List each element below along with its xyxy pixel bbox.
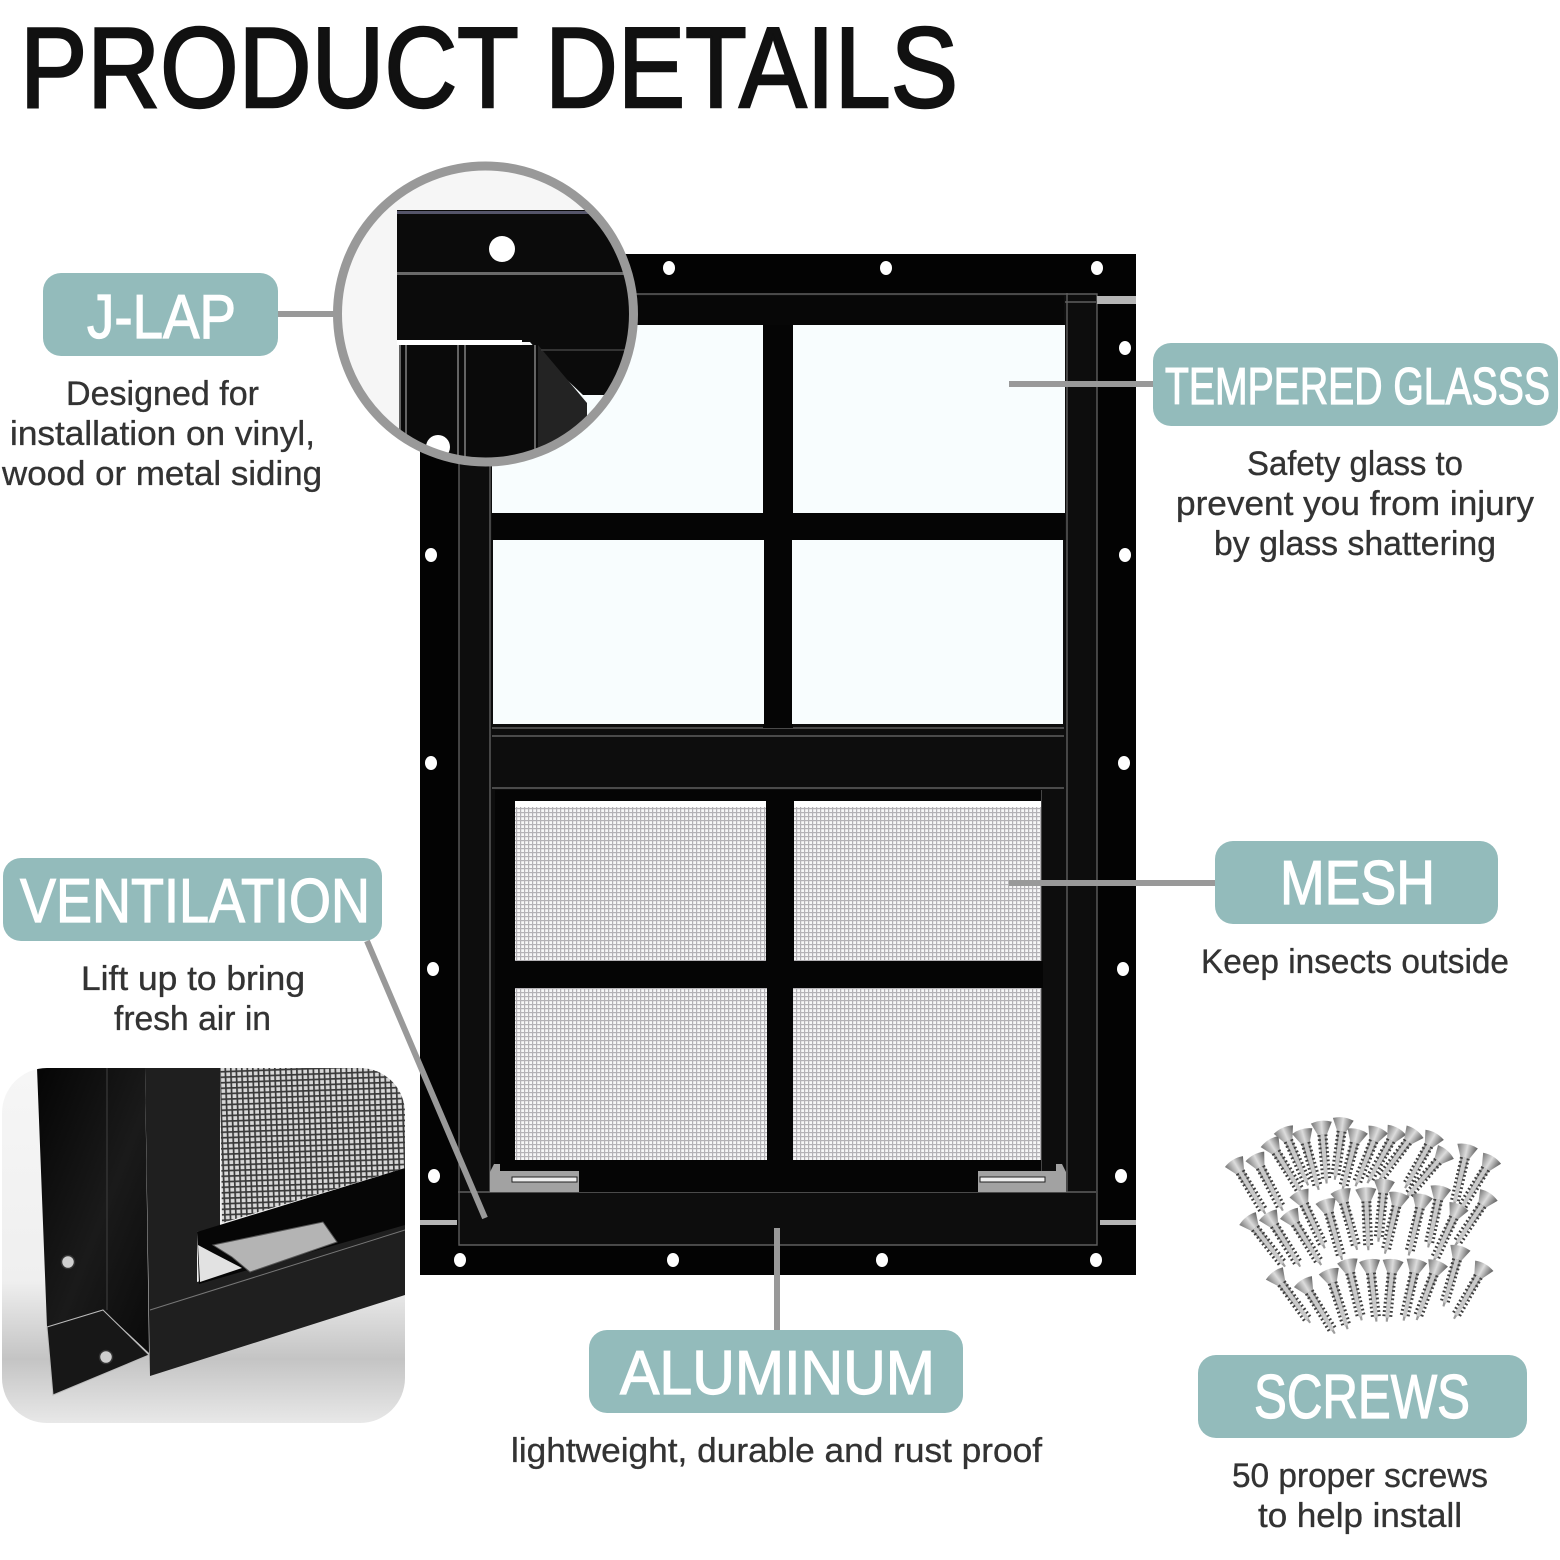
callout: aluminum: lightweight, durable and rust proof [511, 1432, 1043, 1470]
window muntins [492, 325, 1065, 1192]
photo black rail [197, 1168, 405, 1284]
callout: ventilation [3, 858, 382, 1038]
mesh top highlight [515, 801, 1041, 807]
callout: tempered glass: prevent you from injury [1176, 485, 1534, 523]
callout: screws [1198, 1355, 1527, 1535]
title: PRODUCT DETAILS [20, 5, 958, 132]
callout: j-lap: Designed for [66, 375, 259, 413]
mounting holes [425, 261, 1131, 1267]
callout: screws: SCREWS [1254, 1363, 1470, 1432]
callout: mesh [1201, 841, 1509, 981]
photo mesh [220, 1068, 405, 1223]
photo left flange [37, 1068, 149, 1353]
photo lower plate [47, 1310, 149, 1395]
callout: aluminum: ALUMINUM [620, 1339, 935, 1408]
photo latch [213, 1222, 337, 1272]
callout: ventilation: VENTILATION [20, 867, 370, 936]
glass panes [492, 325, 1065, 724]
callout: mesh: MESH [1280, 849, 1435, 918]
callout: tempered glass: Safety glass to [1247, 445, 1463, 483]
callout: ventilation: Lift up to bring [81, 960, 305, 998]
callout: j-lap [1, 273, 322, 493]
latches [490, 1164, 1066, 1192]
window inner frame [458, 293, 1097, 1245]
photo main frame [145, 1068, 405, 1376]
j-lap magnifier circle [338, 166, 651, 470]
mesh panes [515, 803, 1041, 1160]
photo rivets [62, 1256, 112, 1364]
ventilation photo [2, 1068, 405, 1423]
callout: aluminum [511, 1330, 1043, 1470]
callout: mesh: Keep insects outside [1201, 943, 1509, 981]
window product [420, 254, 1136, 1275]
callout: screws: 50 proper screws [1232, 1457, 1488, 1495]
connector lines [278, 314, 1215, 1330]
callout: tempered glass: by glass shattering [1214, 525, 1496, 563]
callout: screws: to help install [1258, 1497, 1462, 1535]
photo mirror [198, 1245, 242, 1282]
icon: screws [1224, 1116, 1502, 1339]
callout: ventilation: fresh air in [114, 1000, 271, 1038]
callout: j-lap: installation on vinyl, [10, 415, 315, 453]
window outer flange [420, 254, 1136, 1275]
callout: j-lap: J-LAP [87, 283, 236, 352]
callout: tempered glass [1153, 343, 1558, 563]
callout: j-lap: wood or metal siding [1, 455, 322, 493]
flange corner highlights [420, 296, 1136, 1225]
